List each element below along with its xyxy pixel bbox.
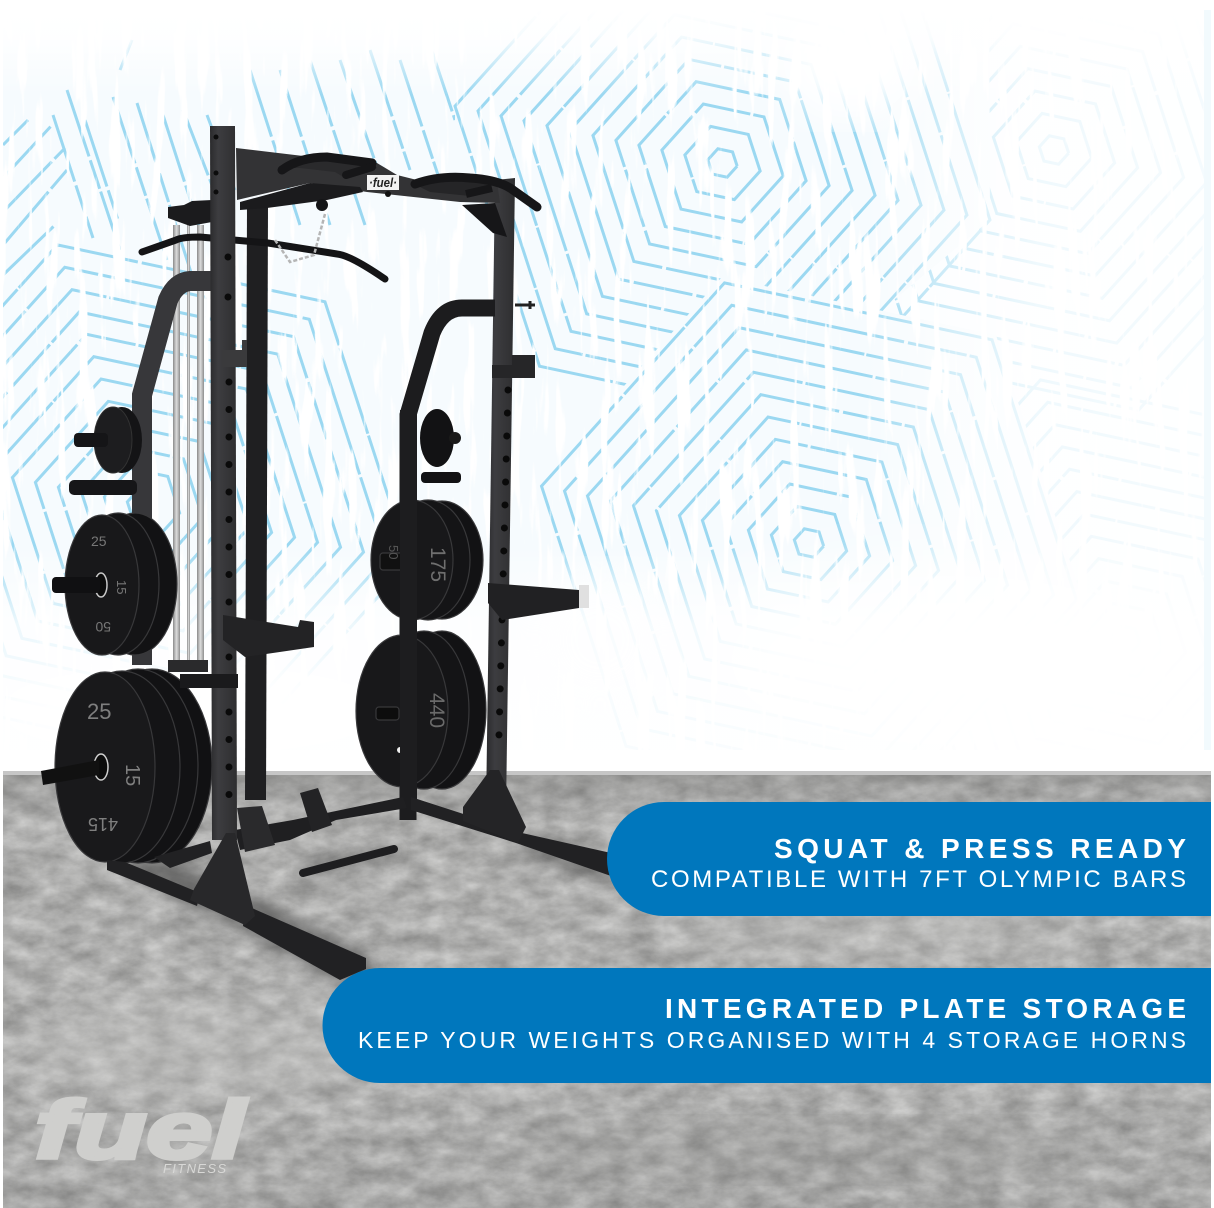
- cable foot bracket: [237, 806, 275, 852]
- rear right upright: [486, 178, 515, 810]
- floor handle bar: [303, 849, 394, 873]
- logo: fuel fitness: fuel: [35, 1085, 248, 1176]
- lat pulldown bar: [142, 237, 385, 279]
- callout: squat and press ready: [607, 802, 1211, 916]
- right upper plate stack: 175: [426, 547, 449, 582]
- right upper plate stack: 50: [386, 545, 401, 559]
- top beam: [236, 148, 507, 237]
- left J-cup block: [222, 340, 247, 367]
- right upright vertical in front of plates: [400, 410, 417, 810]
- right curved arm: [408, 308, 495, 820]
- left gusset: [190, 833, 255, 925]
- callout heading: SQUAT & PRESS READY: [774, 833, 1186, 864]
- right J-cup: [492, 355, 535, 378]
- left lower plate stack: 415: [88, 814, 118, 834]
- right pin hook: [515, 301, 535, 309]
- right base rail: [411, 797, 611, 876]
- left upper plate stack: 15: [114, 580, 129, 594]
- front left upright: [210, 126, 237, 840]
- rear cross tie: [180, 674, 238, 688]
- left lower plate stack: 25: [87, 699, 111, 724]
- left upper plate stack: 25: [91, 533, 107, 549]
- callout heading: INTEGRATED PLATE STORAGE: [665, 993, 1186, 1024]
- right small plate and peg: [420, 409, 461, 483]
- white wall background: [0, 0, 1214, 772]
- left pull-up grip: [282, 156, 377, 178]
- left base rails: [107, 841, 366, 980]
- right pull-up grip: [415, 177, 537, 207]
- callout subheading: KEEP YOUR WEIGHTS ORGANISED WITH 4 STORAGE HORNS: [358, 1027, 1186, 1053]
- floor shadow under rack: [120, 835, 610, 985]
- callout subheading: COMPATIBLE WITH 7FT OLYMPIC BARS: [651, 866, 1186, 893]
- left small plate and peg: [69, 407, 142, 495]
- left safety arm: [223, 615, 314, 657]
- left curved arm: [142, 281, 212, 665]
- half rack: [41, 126, 611, 980]
- right lower plate stack: 440: [425, 693, 448, 728]
- geometric hexagon wall pattern: [3, 31, 1204, 738]
- right upper plate stack: [371, 500, 483, 620]
- logo: fuel fitness: [35, 1085, 248, 1176]
- foot rest: [300, 788, 332, 832]
- right safety arm: [488, 583, 589, 620]
- right lower plate stack: [356, 631, 486, 789]
- rear left upright: [245, 205, 268, 800]
- left upper plate stack: 50: [95, 619, 111, 635]
- left lower plate stack: [41, 669, 212, 863]
- logo: fuel fitness: FITNESS: [163, 1161, 226, 1176]
- rear base beam: [235, 797, 407, 850]
- fuel badge on beam: ·fuel·: [369, 175, 397, 190]
- chain: [275, 214, 325, 262]
- cable stack: steel guide rods: [168, 225, 208, 672]
- left upper plate stack: [52, 513, 177, 655]
- left lower plate stack: 15: [121, 764, 143, 786]
- concrete floor: [0, 771, 1214, 1208]
- pulley bracket: [168, 200, 212, 226]
- callout: integrated plate storage: [322, 968, 1211, 1083]
- right gusset: [463, 770, 526, 843]
- white fading overlays on pattern: [0, 0, 1214, 772]
